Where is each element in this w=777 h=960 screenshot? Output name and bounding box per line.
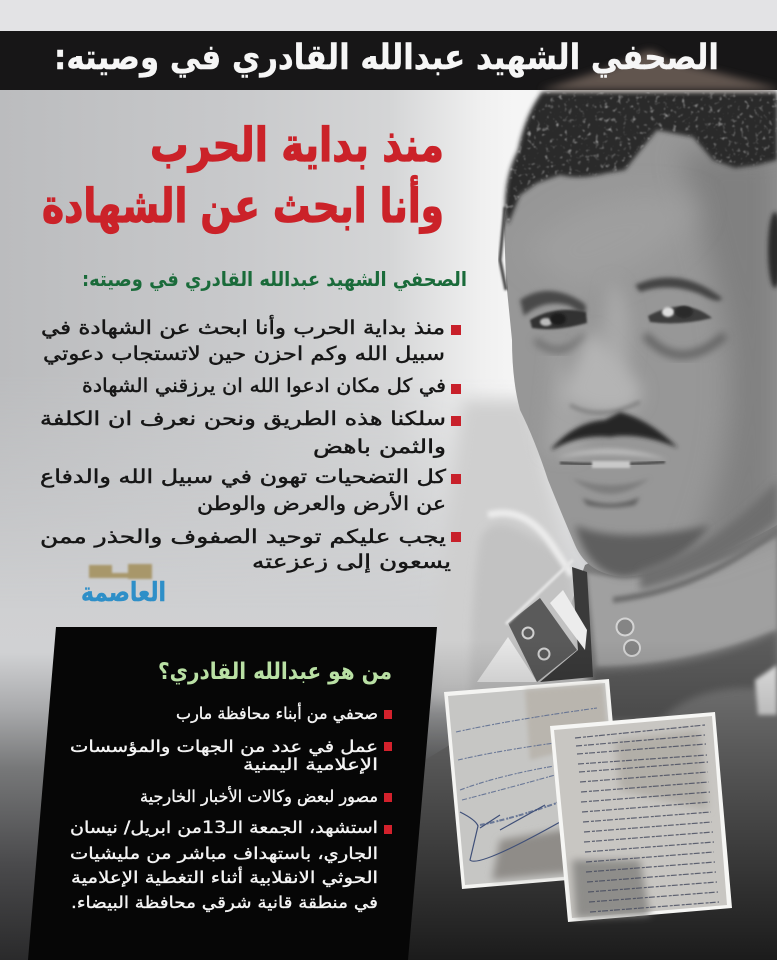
header hair texture — [540, 50, 777, 90]
photo: nose — [562, 330, 641, 414]
bio item 4 — [70, 818, 378, 913]
logo: wordmark: العاصمة — [81, 578, 166, 608]
document 1 signature — [460, 805, 560, 861]
quote 3: سلكنا هذه الطريق ونحن نعرف ان الكلفة — [40, 408, 446, 430]
bottom dark fade — [400, 640, 777, 960]
bio item 4: الحوثي الانقلابية أثناء التغطية الإعلامية — [71, 866, 378, 888]
handwritten document 2 — [550, 712, 732, 922]
main title — [42, 118, 444, 234]
bio item 1: صحفي من أبناء محافظة مارب — [176, 702, 378, 724]
logo — [81, 564, 166, 608]
logo: building icon — [89, 564, 152, 579]
quote 5 — [40, 526, 451, 574]
photo: hair — [500, 92, 777, 290]
panel bullets — [384, 710, 392, 834]
bio item 2: عمل في عدد من الجهات والمؤسسات — [70, 737, 378, 757]
photo: wall behind shoulder — [425, 400, 585, 700]
quote 3: والثمن باهض — [313, 436, 446, 458]
list bullets — [451, 325, 461, 542]
photo: face — [504, 100, 777, 590]
bio item 4: استشهد، الجمعة الـ13من ابريل/ نيسان — [70, 818, 378, 838]
quote 2: في كل مكان ادعوا الله ان يرزقني الشهادة — [82, 375, 446, 397]
header bar — [0, 31, 777, 90]
quote 5: يسعون إلى زعزعته — [252, 551, 451, 574]
photo: brows and eyes — [520, 277, 725, 355]
quote 4: كل التضحيات تهون في سبيل الله والدفاع — [40, 466, 447, 488]
panel: who is Abdullah al-Qadri — [28, 627, 437, 960]
photo: shirt — [405, 470, 777, 960]
document 2 handwriting — [575, 725, 719, 912]
bio item 2: الإعلامية اليمنية — [243, 755, 378, 774]
main title: وأنا ابحث عن الشهادة — [42, 175, 444, 234]
handwritten document 1 — [444, 679, 626, 889]
will quotes list — [40, 315, 461, 574]
bio item 2 — [70, 737, 378, 774]
bio item 4: الجاري، باستهداف مباشر من مليشيات — [70, 844, 378, 864]
bio item 3: مصور لبعض وكالات الأخبار الخارجية — [140, 786, 378, 807]
quote 3 — [40, 408, 446, 458]
quote 4 — [40, 466, 447, 515]
panel heading: من هو عبدالله القادري؟ — [158, 659, 392, 685]
photo: epaulette and placket — [506, 560, 593, 682]
portrait photo — [405, 92, 777, 960]
quote 4: عن الأرض والعرض والوطن — [197, 492, 446, 515]
document 1 handwriting — [456, 708, 600, 825]
quote 5: يجب عليكم توحيد الصفوف والحذر ممن — [40, 526, 446, 548]
green subheading: الصحفي الشهيد عبدالله القادري في وصيته: — [82, 267, 467, 292]
main title: منذ بداية الحرب — [150, 118, 444, 173]
quote 1: سبيل الله وكم احزن حين لاتستجاب دعوتي — [43, 343, 445, 365]
bio item 4: في منطقة قانية شرقي محافظة البيضاء. — [71, 893, 378, 913]
quote 1 — [41, 315, 445, 365]
photo: shirt buttons — [616, 618, 640, 656]
quote 1: منذ بداية الحرب وأنا ابحث عن الشهادة في — [41, 315, 445, 339]
photo: moustache and mouth — [552, 412, 678, 508]
photo: shoulder — [470, 513, 590, 700]
photo: ear shadow — [768, 212, 777, 288]
